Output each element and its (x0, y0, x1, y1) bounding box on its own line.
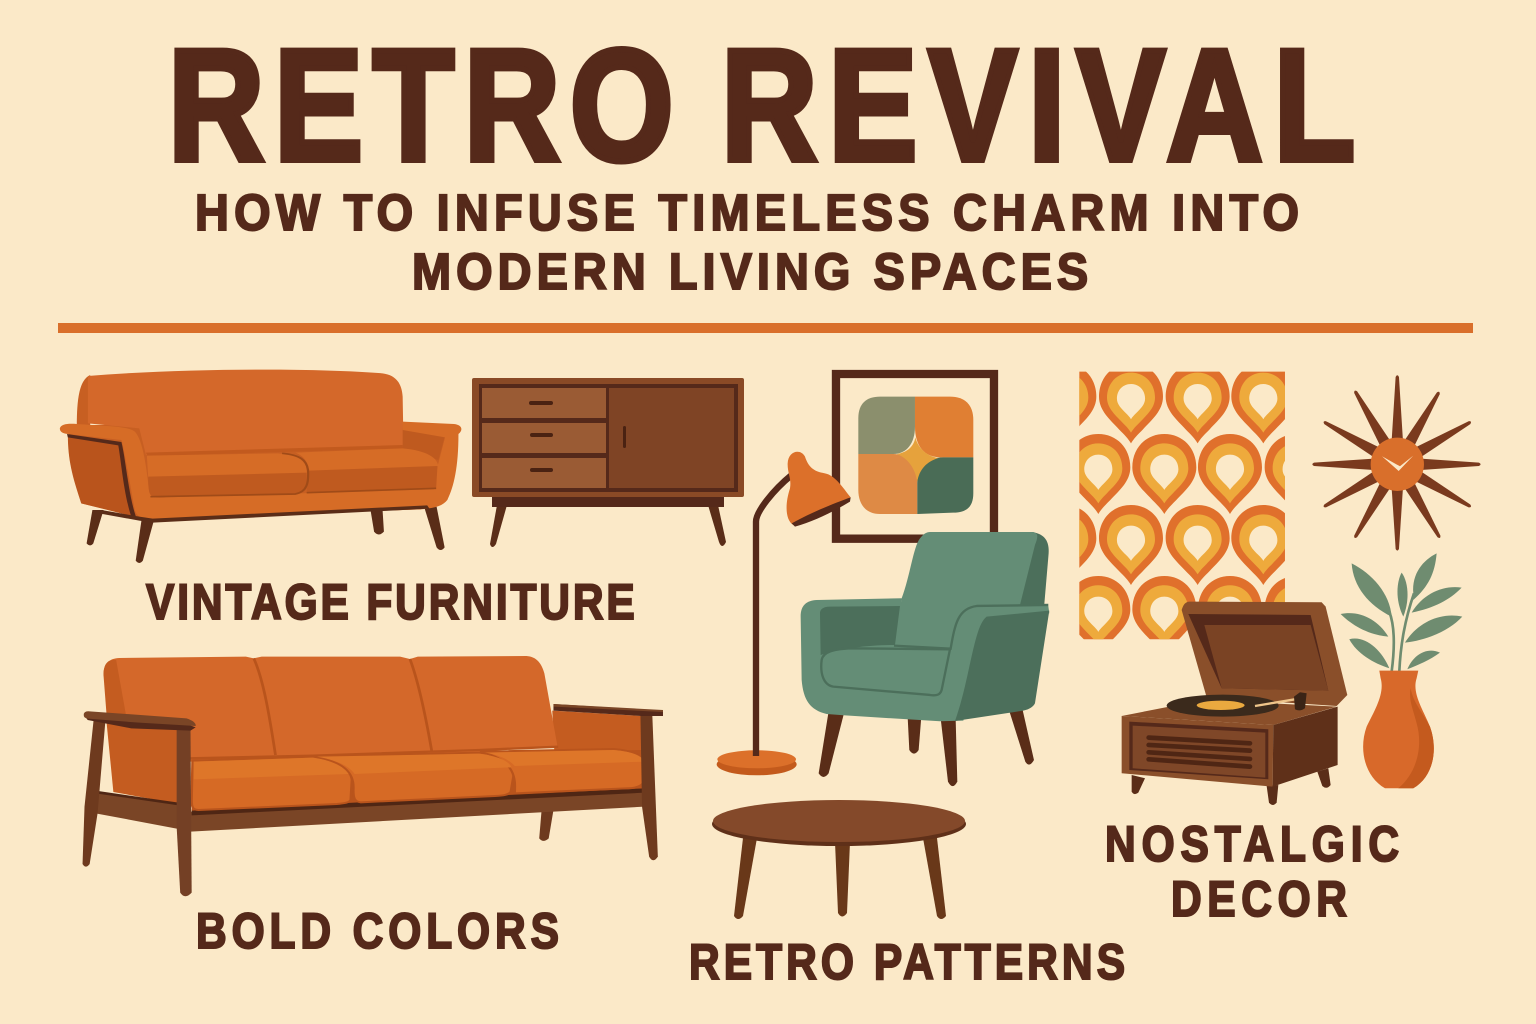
icon: sunburst clock (1312, 375, 1481, 551)
icon: orange two-seat sofa (60, 370, 461, 563)
panel: retro wallpaper pattern (1032, 363, 1361, 656)
label: bold colors: BOLD COLORS (196, 903, 559, 959)
divider (58, 323, 1473, 333)
icon: framed abstract art (836, 374, 994, 539)
icon: floor lamp (717, 452, 851, 775)
label: nostalgic decor: DECOR (1171, 871, 1347, 927)
icon: three-seat sofa with wood frame (83, 656, 663, 896)
icon: record player (1122, 602, 1347, 805)
icon: plant in orange vase (1341, 553, 1462, 788)
icon: green armchair (801, 532, 1049, 786)
label: vintage furniture: VINTAGE FURNITURE (146, 574, 635, 630)
label: nostalgic decor: NOSTALGIC (1105, 816, 1399, 872)
title (168, 17, 1355, 195)
icon: wooden sideboard (472, 378, 744, 547)
title: RETRO (168, 17, 674, 195)
subtitle: MODERN LIVING SPACES (412, 244, 1088, 300)
icon: round coffee table (712, 800, 966, 919)
label: retro patterns: RETRO PATTERNS (689, 934, 1125, 990)
subtitle (195, 185, 1299, 300)
title: REVIVAL (721, 17, 1355, 195)
label: nostalgic decor (1105, 816, 1399, 927)
subtitle: HOW TO INFUSE TIMELESS CHARM INTO (195, 185, 1299, 241)
